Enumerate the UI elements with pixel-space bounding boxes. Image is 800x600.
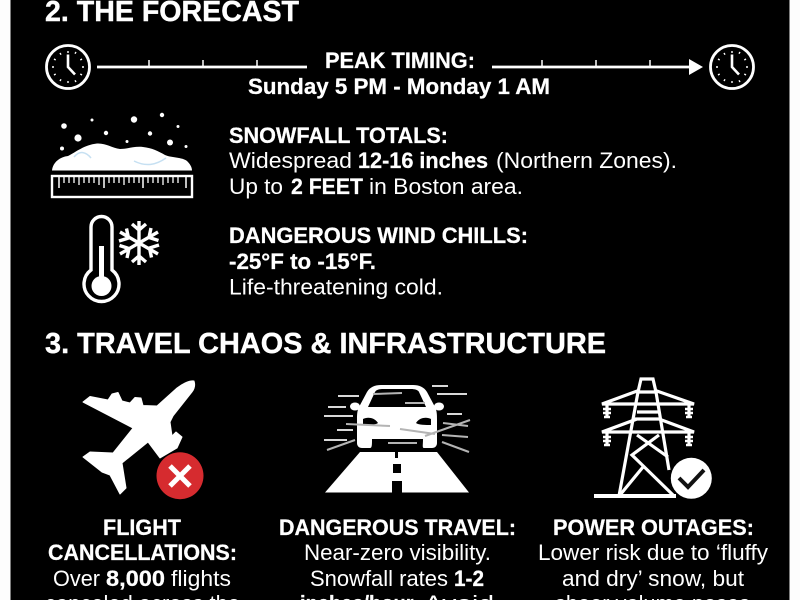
text: dangerous travel: DANGEROUS TRAVEL:: [279, 515, 516, 540]
text: flight cancellations: CANCELLATIONS:: [48, 540, 237, 565]
heading: travel chaos and infrastructure: 3. TRAVEL CHAOS & INFRASTRUCTURE: [45, 328, 606, 360]
text: power outages: Lower risk due to ‘fluffy: [538, 540, 768, 565]
text block: dangerous wind chills: Life-threatening cold.: [229, 274, 443, 300]
text block: snowfall totals: 12-16 inches: [358, 148, 488, 173]
text: power outages: POWER OUTAGES:: [553, 515, 754, 540]
icon: thermometer and snowflake: [84, 216, 159, 302]
text: power outages: [538, 515, 768, 600]
text block: snowfall totals: (Northern Zones).: [496, 148, 677, 173]
text: peak timing label: PEAK TIMING:: [325, 48, 475, 73]
text: peak timing hours: Sunday 5 PM - Monday 1 AM: [248, 74, 550, 99]
arrow: left timeline segment: [97, 60, 307, 67]
text block: dangerous wind chills: [229, 223, 528, 300]
icon: right clock: [710, 46, 754, 88]
text: power outages: and dry’ snow, but: [562, 566, 744, 591]
text: dangerous travel: Snowfall rates: [310, 566, 448, 591]
text block: dangerous wind chills: DANGEROUS WIND CHILLS:: [229, 223, 528, 248]
text: flight cancellations: [45, 515, 240, 600]
panel: flight cancellations: [45, 381, 240, 600]
text: flight cancellations: 8,000: [106, 566, 165, 591]
icon: car on snowy road: [324, 385, 470, 493]
icon: snow on ruler: [52, 113, 192, 197]
icon: check badge: [670, 457, 713, 500]
text block: snowfall totals: in Boston area.: [369, 174, 523, 199]
text block: snowfall totals: SNOWFALL TOTALS:: [229, 123, 448, 148]
text block: snowfall totals: 2 FEET: [291, 174, 364, 199]
text block: snowfall totals: [229, 123, 677, 199]
text block: snowfall totals: Up to: [229, 174, 283, 199]
peak timing timeline: [46, 46, 754, 99]
arrow: right timeline segment: [492, 59, 703, 75]
text: flight cancellations: FLIGHT: [103, 515, 182, 540]
text block: snowfall totals: Widespread: [229, 148, 352, 173]
text: dangerous travel: 1-2: [454, 566, 484, 591]
text: dangerous travel: [279, 515, 516, 600]
icon: left clock: [46, 46, 90, 88]
icon: red cancel badge: [156, 452, 204, 499]
icon: transmission tower: [594, 379, 694, 496]
text: dangerous travel: Near-zero visibility.: [304, 540, 491, 565]
panel: power outages: [538, 379, 768, 600]
text: flight cancellations: Over: [53, 566, 100, 591]
panel: dangerous travel: [279, 385, 516, 600]
text block: dangerous wind chills: -25°F to -15°F.: [229, 249, 376, 274]
icon: airplane: [83, 381, 195, 494]
text: flight cancellations: flights: [171, 566, 231, 591]
